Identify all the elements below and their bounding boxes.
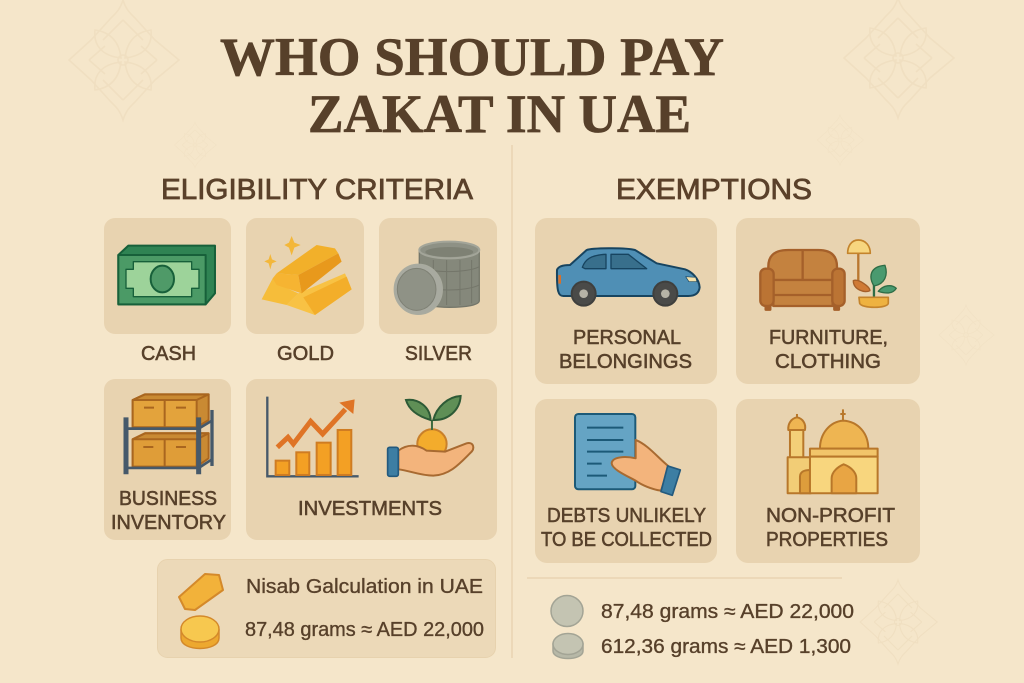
text: second value: 612,36 grams ≈ AED 1,300 — [601, 636, 851, 658]
label: cash: CASH — [141, 343, 196, 365]
label: investments: INVESTMENTS — [298, 498, 442, 520]
icon: silver coin — [551, 596, 583, 626]
panel: cash — [104, 218, 231, 365]
icon: gold bars — [262, 236, 352, 315]
label: gold: GOLD — [277, 343, 334, 365]
decorative ornament: bottom right — [860, 580, 937, 664]
icon: gold bar — [179, 574, 223, 610]
panel: furniture, clothing — [736, 218, 920, 384]
label: non-profit properties — [766, 505, 895, 551]
label: personal belongings — [559, 327, 692, 373]
label: debts unlikely to be collected — [541, 505, 712, 551]
label: business inventory: BUSINESS — [119, 488, 217, 510]
panel: business inventory — [104, 379, 231, 540]
icon: car — [557, 248, 700, 306]
icon: silver disc — [553, 634, 583, 658]
title: WHO SHOULD PAY — [220, 27, 724, 87]
panel: silver — [379, 218, 497, 365]
decorative ornament: small upper left — [174, 122, 216, 168]
icon: banknote stack — [118, 246, 215, 304]
icon: sofa, lamp and plant — [760, 240, 896, 310]
label: furniture, clothing: FURNITURE, — [769, 327, 888, 349]
label: personal belongings: BELONGINGS — [559, 351, 692, 373]
panel: personal belongings — [535, 218, 717, 384]
icon: gold coin — [181, 616, 219, 648]
label: non-profit properties: NON-PROFIT — [766, 505, 895, 527]
decorative ornament: top right — [844, 0, 954, 118]
decorative ornament: right side — [939, 305, 994, 365]
panel: gold — [246, 218, 364, 365]
text: first value: 87,48 grams ≈ AED 22,000 — [601, 601, 854, 623]
vertical divider — [511, 145, 513, 658]
icon: shelves with boxes — [126, 394, 212, 474]
panel: debts unlikely to be collected — [535, 399, 717, 563]
title: ZAKAT IN UAE — [308, 84, 691, 144]
icon: hand holding document — [575, 414, 680, 495]
text: nisab heading: Nisab Galculation in UAE — [246, 576, 483, 598]
heading: exemptions: EXEMPTIONS — [616, 174, 812, 206]
exemptions values — [551, 596, 854, 658]
panel: non-profit properties — [736, 399, 920, 563]
title — [220, 27, 724, 144]
panel: investments — [246, 379, 497, 540]
label: personal belongings: PERSONAL — [573, 327, 681, 349]
label: business inventory — [111, 488, 226, 534]
label: furniture, clothing — [769, 327, 888, 373]
label: debts unlikely to be collected: TO BE COLLECTED — [541, 529, 712, 551]
text: gold nisab value: 87,48 grams ≈ AED 22,000 — [245, 619, 484, 641]
decorative ornament: top left — [69, 0, 179, 120]
panel: nisab calculation — [158, 560, 496, 658]
label: silver: SILVER — [405, 343, 472, 365]
decorative ornament: small upper right — [817, 115, 864, 165]
icon: hand with sprouting coin — [388, 396, 473, 476]
label: debts unlikely to be collected: DEBTS UNLIKELY — [547, 505, 706, 527]
heading: eligibility criteria: ELIGIBILITY CRITERIA — [161, 174, 474, 206]
horizontal divider — [527, 577, 842, 579]
label: furniture, clothing: CLOTHING — [775, 351, 881, 373]
icon: mosque — [788, 409, 878, 493]
label: business inventory: INVENTORY — [111, 512, 226, 534]
icon: growth chart — [267, 397, 359, 476]
icon: silver coins — [394, 242, 479, 314]
label: non-profit properties: PROPERTIES — [766, 529, 888, 551]
